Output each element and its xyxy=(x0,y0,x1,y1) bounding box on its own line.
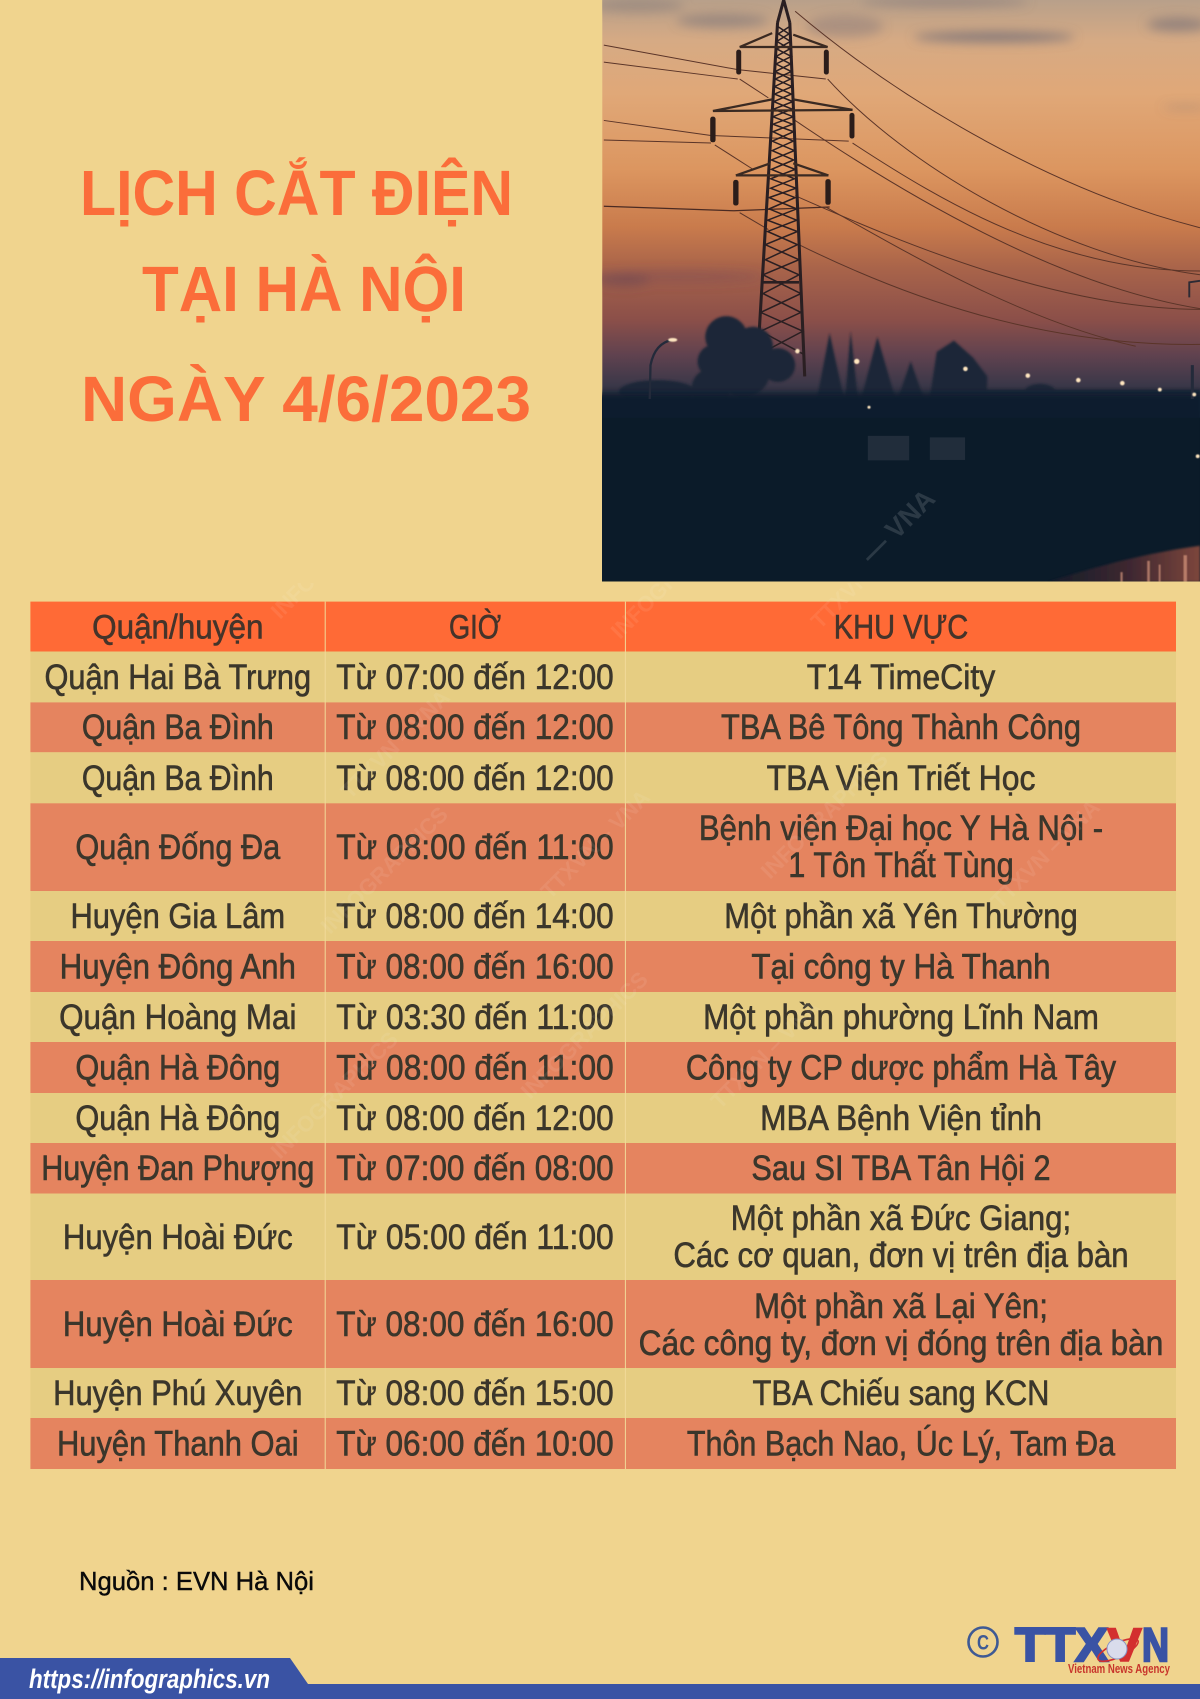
row 1: T14 TimeCity xyxy=(807,658,996,697)
row 12: Huyện Hoài Đức xyxy=(63,1305,293,1344)
row 4: Từ 08:00 đến 11:00 xyxy=(336,828,614,867)
row 9: MBA Bệnh Viện tỉnh xyxy=(760,1099,1042,1138)
row 1: Từ 07:00 đến 12:00 xyxy=(336,658,614,697)
row 1: Quận Hai Bà Trưng xyxy=(44,658,311,697)
row 4: Quận Đống Đa xyxy=(75,828,281,867)
row 11: Huyện Hoài Đức xyxy=(63,1218,293,1257)
header row: Quận/huyện xyxy=(92,608,263,646)
row 8: Từ 08:00 đến 11:00 xyxy=(336,1048,614,1088)
row 13: TBA Chiếu sang KCN xyxy=(752,1374,1050,1413)
row 3: TBA Viện Triết Học xyxy=(767,759,1035,798)
footer band xyxy=(0,1658,1200,1699)
title: NGÀY 4/6/2023 xyxy=(81,363,531,435)
row 5: Một phần xã Yên Thường xyxy=(724,897,1078,936)
row 13: Từ 08:00 đến 15:00 xyxy=(336,1374,614,1413)
row 14: Từ 06:00 đến 10:00 xyxy=(336,1424,614,1464)
row 5 xyxy=(30,891,1176,941)
row 1 xyxy=(30,652,1176,702)
row 3 xyxy=(30,752,1176,803)
title: TẠI HÀ NỘI xyxy=(142,252,466,325)
watermarks: TTXVN – VNA xyxy=(706,995,825,1114)
row 8: Quận Hà Đông xyxy=(75,1048,280,1088)
row 2 xyxy=(30,702,1176,752)
title: LỊCH CẮT ĐIỆN xyxy=(80,156,513,229)
row 10: Từ 07:00 đến 08:00 xyxy=(336,1149,614,1188)
source note: Nguồn : EVN Hà Nội xyxy=(79,1566,314,1596)
watermarks: INFOGRAPHICS xyxy=(316,802,453,939)
title xyxy=(80,156,531,435)
row 13 xyxy=(30,1368,1176,1418)
row 10 xyxy=(30,1143,1176,1194)
logo: TTXVN: TTX xyxy=(1015,1618,1108,1671)
row 4: Bệnh viện Đại học Y Hà Nội - xyxy=(699,809,1103,848)
row 13: Huyện Phú Xuyên xyxy=(53,1374,302,1413)
row 12 xyxy=(30,1280,1176,1368)
header row: KHU VỰC xyxy=(834,608,968,646)
photo: power tower at dusk xyxy=(589,0,1200,589)
watermarks: INFOGRAPHICS xyxy=(516,967,653,1104)
watermarks: INFOGRAPHICS xyxy=(266,1027,403,1164)
watermarks: TTXVN – VNA xyxy=(986,795,1105,914)
row 10: Huyện Đan Phượng xyxy=(41,1149,314,1188)
row 12: Từ 08:00 đến 16:00 xyxy=(336,1305,614,1344)
row 2: Quận Ba Đình xyxy=(82,708,274,747)
row 8: Công ty CP dược phẩm Hà Tây xyxy=(686,1048,1117,1088)
logo: TTXVN: N xyxy=(1142,1618,1169,1671)
row 14 xyxy=(30,1418,1176,1469)
table xyxy=(30,602,1176,1469)
logo: TTXVN: V xyxy=(1107,1618,1143,1671)
row 12: Một phần xã Lại Yên; xyxy=(754,1287,1048,1326)
watermarks: INFOGRAPHICS xyxy=(606,507,743,644)
row 7 xyxy=(30,992,1176,1042)
row 6: Huyện Đông Anh xyxy=(60,948,296,986)
logo: TTXVN xyxy=(968,1618,1171,1676)
row 8 xyxy=(30,1042,1176,1093)
row 7: Từ 03:30 đến 11:00 xyxy=(336,998,614,1037)
row 9: Từ 08:00 đến 12:00 xyxy=(336,1099,614,1138)
row 5: Huyện Gia Lâm xyxy=(70,897,285,936)
row 5: Từ 08:00 đến 14:00 xyxy=(336,897,614,936)
row 6 xyxy=(30,941,1176,992)
row 9: Quận Hà Đông xyxy=(75,1099,280,1138)
row 2: Từ 08:00 đến 12:00 xyxy=(336,708,614,747)
row 11: Một phần xã Đức Giang; xyxy=(731,1199,1071,1238)
row 14: Huyện Thanh Oai xyxy=(57,1424,299,1464)
row 7: Quận Hoàng Mai xyxy=(59,998,296,1037)
row 6: Tại công ty Hà Thanh xyxy=(751,948,1051,986)
watermarks: TTXVN – VNA xyxy=(536,785,655,904)
watermarks: INFOGRAPHICS xyxy=(266,487,403,624)
row 4: 1 Tôn Thất Tùng xyxy=(788,846,1014,885)
row 2: TBA Bê Tông Thành Công xyxy=(721,708,1081,747)
row 11: Từ 05:00 đến 11:00 xyxy=(336,1218,614,1257)
row 3: Từ 08:00 đến 12:00 xyxy=(336,759,614,798)
watermarks: TTXVN – VNA xyxy=(806,515,925,634)
watermarks xyxy=(270,586,1100,1158)
watermark on photo: — VNA xyxy=(855,483,941,569)
row 14: Thôn Bạch Nao, Úc Lý, Tam Đa xyxy=(687,1424,1116,1464)
row 11 xyxy=(30,1194,1176,1280)
logo: TTXVN: C xyxy=(977,1632,989,1654)
row 7: Một phần phường Lĩnh Nam xyxy=(703,998,1099,1037)
watermarks: TTXVN – VNA xyxy=(336,685,455,804)
row 3: Quận Ba Đình xyxy=(82,759,274,798)
row 6: Từ 08:00 đến 16:00 xyxy=(336,948,614,986)
row 9 xyxy=(30,1093,1176,1143)
header row xyxy=(30,602,1176,652)
footer band: https://infographics.vn xyxy=(29,1664,270,1694)
header row: GIỜ xyxy=(449,608,501,646)
watermarks: INFOGRAPHICS xyxy=(756,747,893,884)
row 10: Sau SI TBA Tân Hội 2 xyxy=(751,1149,1051,1188)
row 11: Các cơ quan, đơn vị trên địa bàn xyxy=(673,1236,1129,1275)
row 4 xyxy=(30,803,1176,891)
